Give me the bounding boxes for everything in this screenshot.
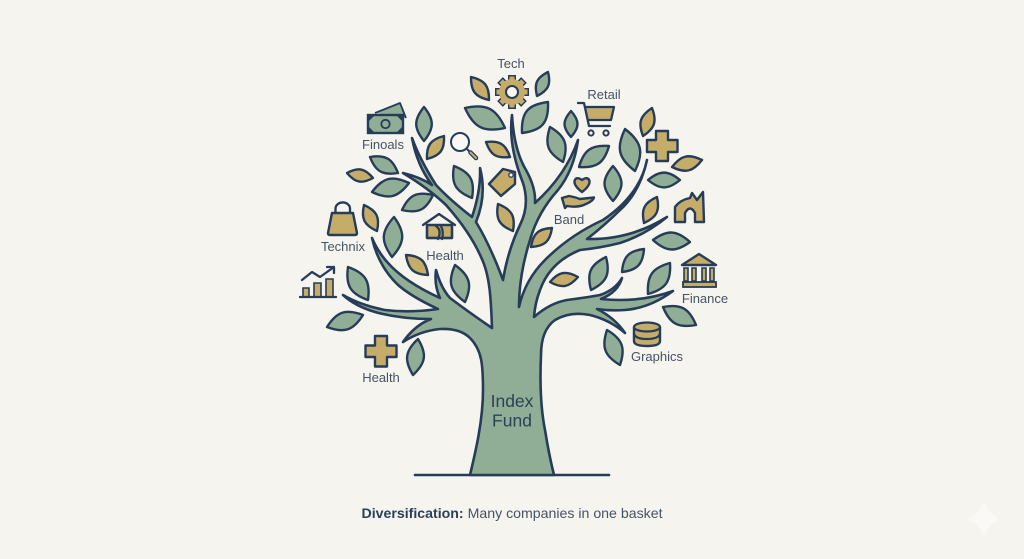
leaf bbox=[532, 70, 553, 98]
leaf bbox=[405, 338, 426, 376]
leaf bbox=[447, 263, 473, 304]
leaves bbox=[324, 70, 704, 376]
label: Finoals: Finoals bbox=[362, 137, 404, 152]
leaf bbox=[466, 73, 494, 104]
leaf bbox=[370, 175, 411, 200]
leaf bbox=[670, 153, 704, 174]
leaf bbox=[527, 223, 556, 252]
leaf bbox=[514, 95, 556, 140]
leaf bbox=[615, 127, 645, 173]
leaf bbox=[617, 244, 649, 277]
leaf bbox=[324, 307, 366, 335]
label: Graphics: Graphics bbox=[631, 349, 684, 364]
icon: gear bbox=[495, 75, 529, 109]
leaf bbox=[346, 167, 374, 184]
ground line bbox=[415, 474, 609, 476]
leaf bbox=[492, 201, 519, 234]
leaf bbox=[416, 107, 432, 141]
leaf bbox=[383, 217, 403, 257]
icon: bank bbox=[682, 254, 716, 287]
leaf bbox=[422, 132, 449, 163]
icon: heart in hand bbox=[562, 178, 594, 208]
leaf bbox=[340, 262, 376, 305]
leaf bbox=[605, 166, 621, 201]
leaf bbox=[549, 271, 579, 288]
icon: growth chart bbox=[300, 267, 336, 297]
label: Band: Band bbox=[554, 212, 584, 227]
trunk label: Index Fund: Fund bbox=[492, 410, 532, 430]
trunk label: Index Fund bbox=[491, 391, 534, 430]
icon: shopping bag bbox=[328, 202, 357, 235]
icon: coin stack bbox=[634, 322, 660, 346]
leaf bbox=[653, 232, 690, 250]
icon: arch building bbox=[675, 192, 704, 222]
leaf bbox=[574, 139, 614, 174]
leaf bbox=[599, 327, 628, 368]
leaf bbox=[641, 258, 677, 299]
label: Health lower: Health bbox=[362, 370, 400, 385]
watermark star bbox=[967, 501, 1000, 538]
leaf bbox=[638, 194, 663, 226]
icon: shopping cart bbox=[578, 103, 614, 136]
leaf bbox=[542, 124, 571, 165]
leaf bbox=[447, 162, 479, 202]
label: Technix: Technix bbox=[321, 239, 366, 254]
icon: house bbox=[423, 214, 455, 239]
icon: banknotes bbox=[368, 103, 406, 133]
leaf bbox=[399, 188, 436, 217]
leaf bbox=[483, 137, 513, 162]
label: Tech: Tech bbox=[497, 56, 525, 71]
icon: plus left bbox=[366, 336, 396, 366]
icon: magnifier bbox=[451, 133, 476, 158]
leaf bbox=[648, 173, 680, 187]
label: Health upper: Health bbox=[426, 248, 464, 263]
tree trunk and branches bbox=[343, 115, 673, 475]
trunk label: Index Fund: Index bbox=[491, 391, 534, 411]
leaf bbox=[460, 99, 510, 137]
leaf bbox=[366, 151, 402, 179]
leaf bbox=[583, 254, 614, 293]
icon: price tag bbox=[489, 169, 515, 196]
icon: plus right bbox=[647, 131, 678, 161]
label: Finance: Finance bbox=[682, 291, 728, 306]
leaf bbox=[358, 202, 383, 234]
leaf bbox=[637, 106, 658, 138]
leaf bbox=[401, 250, 433, 280]
leaf bbox=[565, 111, 577, 137]
label: Retail: Retail bbox=[587, 87, 621, 102]
caption: Diversification: Many companies in one basket bbox=[361, 505, 663, 521]
leaf bbox=[659, 299, 700, 333]
